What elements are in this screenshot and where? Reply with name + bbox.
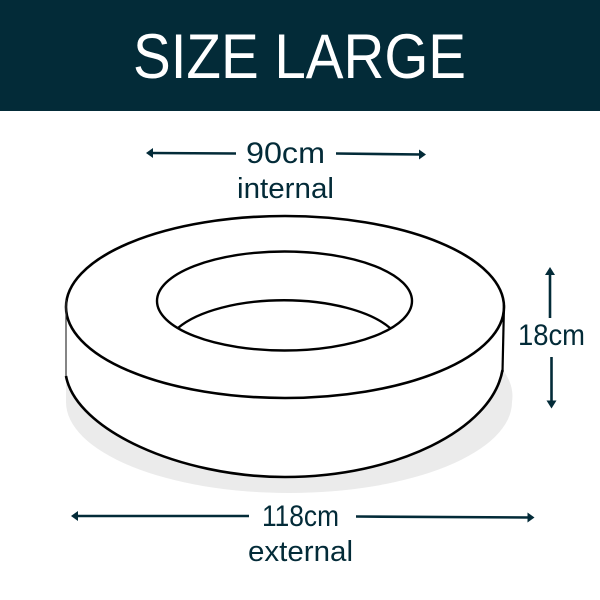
height dimension — [518, 267, 585, 408]
left edge — [65, 300, 67, 378]
arrow: external left — [71, 511, 249, 521]
right edge — [502, 305, 504, 372]
external dimension — [71, 500, 534, 568]
inner opening — [157, 252, 412, 350]
label: 90cm: 90cm — [246, 137, 325, 170]
arrow: external right — [356, 512, 534, 522]
label: external: external — [248, 536, 353, 568]
arrow: height down — [546, 357, 556, 408]
arrow: height up — [545, 267, 555, 318]
inner wall arc — [178, 300, 390, 328]
arrow: internal left — [146, 148, 236, 158]
label: internal: internal — [237, 173, 334, 205]
ground shadow — [66, 370, 512, 493]
outer ellipse — [66, 216, 504, 398]
bottom edge — [66, 370, 502, 477]
label: 118cm: 118cm — [262, 500, 339, 533]
ring side wall — [66, 307, 504, 477]
label: 18cm: 18cm — [518, 319, 585, 352]
title: SIZE LARGE — [133, 22, 466, 92]
internal dimension — [146, 137, 426, 205]
ring illustration — [66, 216, 512, 493]
header banner — [0, 0, 600, 111]
arrow: internal right — [336, 150, 426, 160]
